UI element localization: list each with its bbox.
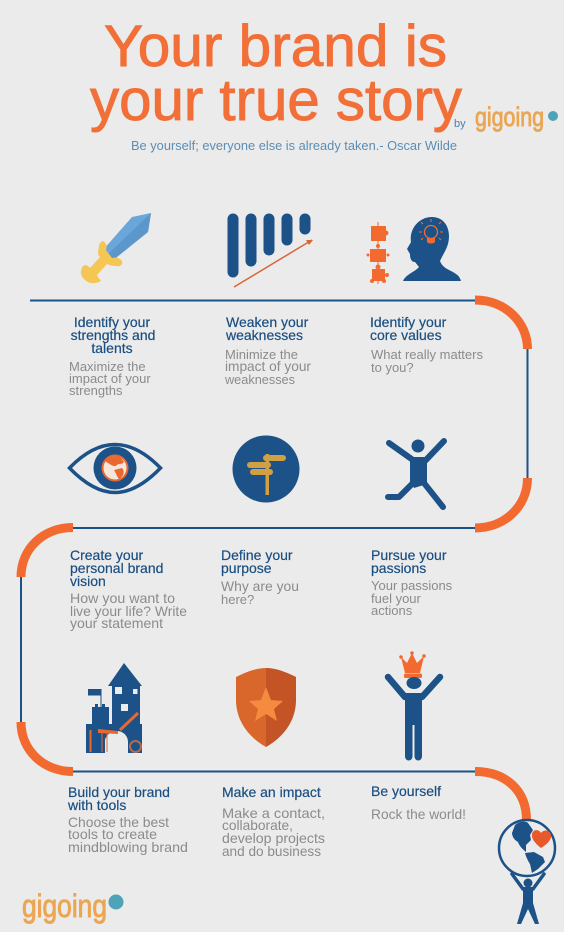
step: build brand with tools: Choose the best — [68, 814, 169, 830]
step text: maximize: strengths — [69, 383, 123, 398]
step: pursue passions: Your passions — [371, 578, 453, 593]
step: make an impact — [222, 784, 325, 859]
step: personal brand vision: your statement — [70, 615, 163, 631]
step: weaken weaknesses — [224, 314, 311, 387]
icon: bars with rising arrow — [233, 219, 313, 287]
step: pursue passions: fuel your — [371, 591, 422, 606]
step: core values: to you? — [371, 360, 414, 375]
bottom gigoing logo: gigoing — [22, 888, 107, 924]
step: weaken weaknesses: Weaken your — [226, 314, 309, 330]
step: be yourself — [371, 783, 466, 822]
step: pursue passions: passions — [371, 560, 426, 576]
step: personal brand vision: How you want to — [70, 590, 175, 606]
step: personal brand vision: vision — [70, 573, 106, 589]
step: make an impact: develop projects — [222, 830, 325, 846]
step: personal brand vision: personal brand — [70, 560, 163, 576]
icon: figure holding globe — [499, 820, 555, 924]
step: weaken weaknesses: Minimize the — [225, 347, 298, 362]
step: make an impact: Make a contact, — [222, 805, 325, 821]
icon: eye with globe — [70, 444, 160, 492]
title: your true story — [90, 68, 462, 133]
step: weaken weaknesses: weaknesses — [224, 372, 295, 387]
quote: Be yourself; everyone else is already taken.- Oscar Wilde — [131, 138, 457, 153]
title: Your brand is — [104, 14, 447, 79]
step: identify strengths: Identify your — [74, 314, 150, 330]
step: core values — [370, 314, 483, 375]
connector path — [21, 300, 528, 820]
step text: maximize: Maximize the — [69, 359, 146, 374]
step: pursue passions: Pursue your — [371, 547, 447, 563]
step: define purpose — [221, 547, 299, 607]
by gigoing logo: gigoing — [475, 102, 544, 132]
step: weaken weaknesses: impact of your — [225, 358, 311, 374]
step: identify strengths — [71, 314, 155, 356]
icon: sword — [81, 213, 151, 283]
step: build brand with tools: with tools — [67, 797, 126, 813]
step: make an impact: Make an impact — [222, 784, 321, 800]
step: weaken weaknesses: weaknesses — [225, 327, 303, 343]
icon: figure with crown — [388, 651, 440, 760]
step: make an impact: and do business — [222, 843, 321, 859]
step: core values: core values — [370, 327, 442, 343]
icon: shield with star — [236, 668, 296, 747]
icon: signpost in circle — [232, 436, 300, 502]
step: core values: What really matters — [371, 347, 483, 362]
step text: maximize: impact of your — [69, 371, 151, 386]
step: define purpose: purpose — [221, 560, 272, 576]
icon: jumping figure — [388, 440, 444, 507]
step: be yourself: Be yourself — [371, 783, 441, 799]
step text: maximize — [69, 359, 151, 398]
icon: puzzle and head with lightbulb — [366, 217, 461, 284]
step: build brand with tools: Build your brand — [68, 784, 170, 800]
step: personal brand vision: Create your — [70, 547, 143, 563]
step: identify strengths: talents — [91, 340, 133, 356]
step: make an impact: collaborate, — [222, 817, 293, 833]
step: pursue passions — [371, 547, 453, 618]
icon: castle with tools — [86, 663, 142, 753]
title — [90, 14, 462, 133]
step: pursue passions: actions — [371, 603, 413, 618]
step: define purpose: here? — [221, 592, 254, 607]
step: build brand with tools: tools to create — [68, 826, 157, 842]
step: identify strengths: strengths and — [71, 327, 155, 343]
step: personal brand vision: live your life? Write — [70, 603, 187, 619]
step: be yourself: Rock the world! — [371, 806, 466, 822]
step: build brand with tools — [67, 784, 188, 855]
by gigoing logo: by — [454, 118, 466, 130]
step: define purpose: Why are you — [221, 578, 299, 594]
step: define purpose: Define your — [221, 547, 293, 563]
step: build brand with tools: mindblowing brand — [68, 839, 188, 855]
step: core values: Identify your — [370, 314, 447, 330]
step: personal brand vision — [70, 547, 187, 631]
